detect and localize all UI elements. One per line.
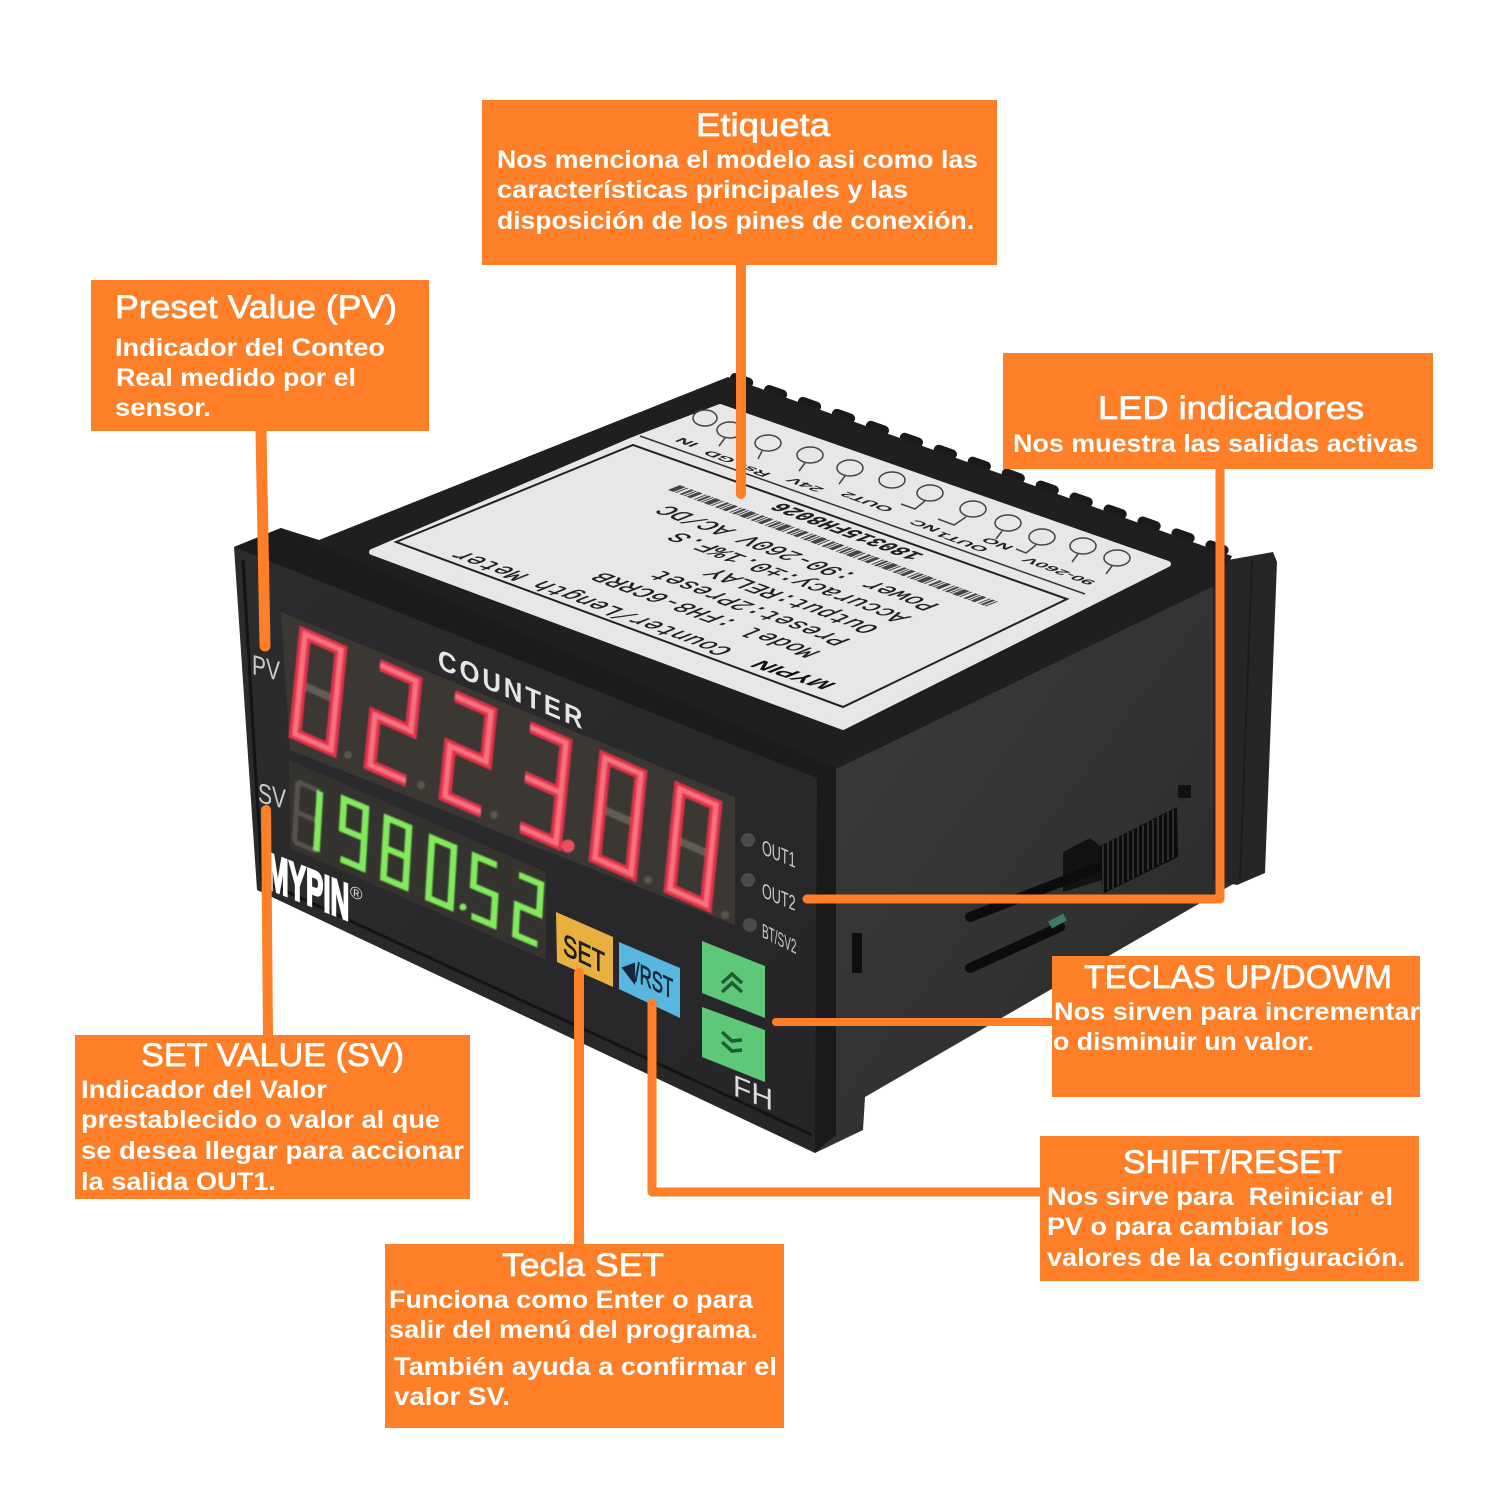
connector: Etiqueta to label (736, 265, 746, 494)
button: up (702, 941, 765, 1018)
label specification text: 180315FH8026 (765, 500, 932, 562)
body text: Indicador del Valor (81, 1076, 327, 1104)
connector: SV (266, 810, 268, 1035)
connector: up/down keys (776, 1018, 1052, 1026)
body text (1053, 998, 1420, 1056)
connector: LED indicators (807, 469, 1220, 899)
body text: la salida OUT1. (81, 1168, 276, 1196)
button: SET: SET (563, 926, 605, 980)
brand logo: MYPIN (267, 841, 349, 932)
body text (81, 1076, 464, 1196)
brand logo: ® (350, 881, 363, 905)
button: down (702, 1007, 765, 1082)
label specification text: Model :FH8-6CRRB (584, 569, 830, 660)
heading: Etiqueta (696, 107, 830, 143)
output LEDs (741, 833, 757, 932)
body text: Nos sirven para incrementar (1054, 998, 1420, 1026)
panel markings: FH (733, 1068, 773, 1118)
panel markings: PV (252, 649, 280, 688)
device body: top face (281, 377, 1232, 772)
label specification text: Preset:2Preset (641, 567, 860, 648)
panel: Set Value (75, 1035, 470, 1199)
label specification text: Power :90-260V AC/DC (648, 502, 949, 613)
body text: prestablecido o valor al que (81, 1106, 440, 1134)
body text: Real medido por el (116, 364, 356, 392)
heading: SET VALUE (SV) (141, 1037, 404, 1073)
panel: Preset Value (91, 280, 429, 431)
body text: Nos sirve para Reiniciar el (1047, 1183, 1393, 1211)
body text: También ayuda a confirmar el (394, 1353, 777, 1381)
panel markings: BT/SV2 (762, 920, 796, 959)
label wiring diagram: GD (700, 449, 740, 464)
connector: PV (261, 431, 265, 646)
body text: Nos menciona el modelo asi como las (497, 146, 978, 174)
label wiring diagram: NO (977, 536, 1018, 551)
body text: características principales y las (497, 176, 908, 204)
label wiring diagram: 90-260V (1019, 556, 1100, 586)
body text: PV o para cambiar los (1047, 1213, 1329, 1241)
panel markings: COUNTER (438, 643, 582, 735)
body text: o disminuir un valor. (1053, 1028, 1314, 1056)
label wiring diagram (672, 410, 1130, 586)
button: SET (556, 912, 613, 987)
panel: Tecla SET (385, 1244, 784, 1428)
label wiring diagram: OUT1 (932, 530, 993, 553)
heading: LED indicadores (1098, 390, 1364, 426)
device front bezel (234, 528, 836, 1153)
device: digital counter (234, 377, 1277, 1153)
body text: disposición de los pines de conexión. (497, 207, 974, 235)
heading: Preset Value (PV) (115, 289, 397, 325)
label brand: MYPIN (744, 658, 843, 691)
label wiring diagram: NC (906, 518, 945, 533)
button: shift/reset: ◀/RST (622, 951, 673, 1006)
green SV display (289, 760, 546, 960)
heading: Tecla SET (502, 1247, 664, 1283)
body text: salir del menú del programa. (389, 1316, 758, 1344)
label specification text: Output:RELAY (697, 565, 889, 636)
label specification text: Counter/Length Meter (442, 547, 743, 658)
body text: se desea llegar para accionar (81, 1137, 464, 1165)
body text (497, 146, 978, 235)
body text: valor SV. (394, 1383, 510, 1411)
connector: RST key (652, 1003, 1040, 1192)
label barcode (672, 487, 992, 604)
body text (115, 334, 385, 422)
body text: Funciona como Enter o para (389, 1286, 754, 1314)
body text: valores de la configuración. (1047, 1244, 1405, 1272)
body text (1047, 1183, 1405, 1272)
label wiring diagram: OUT2 (837, 490, 898, 513)
label specification text (442, 500, 949, 660)
body text (389, 1286, 777, 1411)
label wiring diagram: Rst (732, 462, 775, 478)
panel: Teclas up/down (1052, 956, 1420, 1097)
body text: sensor. (115, 394, 211, 422)
panel: Etiqueta (482, 100, 997, 265)
panel markings (252, 643, 796, 1118)
panel markings: SV (258, 777, 286, 816)
red PV display (281, 612, 735, 925)
label wiring diagram: IN (672, 436, 703, 448)
body text: Indicador del Conteo (115, 334, 385, 362)
label specification text: Accuracy:±0.1%F.S (660, 529, 920, 625)
button: shift/reset (619, 942, 680, 1018)
panel markings: OUT2 (762, 878, 796, 916)
product label sticker (372, 407, 1168, 727)
body text: Nos muestra las salidas activas (1013, 430, 1418, 458)
panel: LED indicadores (1003, 353, 1433, 469)
panel markings: OUT1 (762, 835, 796, 873)
label wiring diagram: 24V (783, 476, 828, 493)
panel: Shift/Reset (1040, 1136, 1419, 1281)
connector: SET key (574, 973, 584, 1244)
heading: TECLAS UP/DOWM (1084, 959, 1392, 995)
heading: SHIFT/RESET (1123, 1144, 1342, 1180)
device body: right side (815, 552, 1277, 1153)
